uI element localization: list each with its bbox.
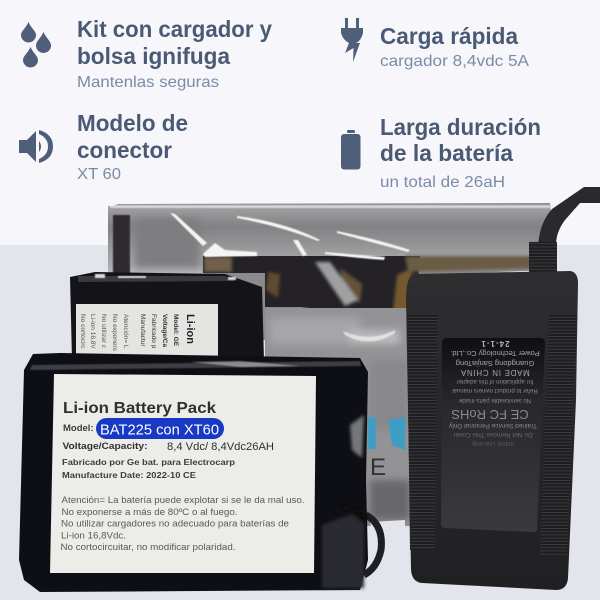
- icon: water drops: [21, 22, 51, 68]
- plastic highlights: [110, 205, 550, 342]
- label text, upside down: Indoor Use only: [472, 440, 514, 446]
- rear battery label: [76, 304, 218, 358]
- label warning text: [60, 495, 304, 552]
- printed label panel: [441, 338, 545, 532]
- label text, upside down: for application of this adapter: [456, 378, 534, 384]
- label text, upside down: No serviceable parts inside: [458, 397, 531, 403]
- label text, upside down: 24-1-1: [480, 339, 510, 348]
- title: modelo de: Modelo de: [77, 110, 188, 136]
- subtitle: un total: un total de 26aH: [380, 174, 505, 191]
- label text, upside down: Power Technology Co.,Ltd.: [450, 349, 540, 358]
- heading block: modelo de conector: [19, 110, 188, 183]
- rotated label text: No utilizar c: [100, 314, 107, 349]
- icon: battery: [341, 130, 360, 170]
- label text, upside down: Guangdong SanjiaTong: [456, 359, 534, 368]
- photo: power adapter charger: [406, 271, 578, 590]
- lower gray bag panel: [265, 308, 411, 526]
- label manufacturer: Fabricado por Ge bat. para Electrocarp: [62, 458, 235, 467]
- right ribs: [540, 315, 577, 555]
- battery label sheet: [50, 374, 316, 573]
- heading block: larga duracion: [341, 114, 541, 191]
- label text, upside down: Do Not Remove This Cover: [452, 431, 533, 438]
- title: carga rapida: Carga rápida: [380, 23, 518, 49]
- white gap below bag: [370, 520, 405, 535]
- left ribs: [407, 315, 438, 550]
- rotated label text: Li-ion: [184, 314, 196, 344]
- label title: Li-ion Battery Pack: [63, 400, 216, 417]
- bag print letter: E: [370, 454, 386, 481]
- title: de la bateria: de la batería: [380, 140, 513, 166]
- blue bag print: [368, 417, 405, 450]
- label warning text: No exponerse a más de 80ºC o al fuego.: [62, 507, 238, 517]
- label warning text: No utilizar cargadores no adecuado para baterías de: [61, 518, 289, 528]
- rotated label text: Manufactur: [139, 314, 146, 347]
- photo: charger cable: [529, 187, 600, 274]
- label warning text: Li-ion 16,8Vdc.: [61, 530, 126, 540]
- photo: front battery pack: [19, 353, 381, 592]
- title: conector: conector: [77, 137, 172, 163]
- heading block: kit con cargador: [21, 16, 272, 91]
- label text, upside down: Trained Service Personal Only: [448, 422, 537, 429]
- page background: lower band: [0, 245, 600, 600]
- rotated label text: Atención= L: [122, 314, 129, 349]
- title line 2: bolsa ignifuga: [77, 43, 230, 69]
- label text, upside down: [448, 339, 540, 446]
- dark interior of bag: [203, 256, 420, 318]
- side reflections: [322, 415, 366, 588]
- rotated label text: Model: GE: [172, 314, 179, 347]
- rotated label text: Voltage/Ca: [161, 314, 168, 347]
- label text, upside down: Refer to product owners manual: [452, 387, 538, 393]
- icon: speaker: [19, 130, 53, 163]
- rotated label text: No exponers: [111, 314, 118, 352]
- subtitle: xt 60: XT 60: [77, 166, 121, 183]
- title: larga duracion: Larga duración: [380, 114, 541, 140]
- strain relief: [529, 242, 557, 274]
- subtitle: mantenlas seguras: Mantenlas seguras: [77, 74, 219, 91]
- battery cable loop: [364, 515, 381, 575]
- label voltage capacity: Voltage/Capacity:: [62, 441, 148, 452]
- top wrap highlight: [30, 361, 361, 370]
- label manufacturer: [62, 458, 235, 480]
- label voltage capacity: 8,4 Vdc/ 8,4Vdc26AH: [167, 441, 274, 453]
- title: kit con cargador y bolsa ignifuga: Kit con cargador y: [77, 16, 272, 42]
- rotated label text: [79, 314, 196, 352]
- blue model highlight: BAT225 con XT60: [100, 422, 219, 438]
- rotated label text: Li-ion 16,8V: [89, 314, 96, 349]
- label text, upside down: CE FC RoHS: [451, 407, 529, 422]
- rotated label text: No cortocirc: [79, 314, 86, 349]
- subtitle: cargador: cargador 8,4vdc 5A: [380, 53, 529, 70]
- label manufacturer: Manufacture Date: 2022-10 CE: [62, 471, 197, 480]
- label warning text: No cortocircuitar, no modificar polaridad.: [60, 542, 236, 552]
- label text, upside down: MADE IN CHINA: [460, 368, 530, 377]
- photo: rear battery pack: [70, 272, 264, 360]
- icon: plug with lightning: [341, 18, 363, 62]
- photo: fire-resistant bag in plastic wrap: [108, 203, 552, 535]
- battery body: [19, 353, 368, 592]
- rotated label text: Fabricado p: [150, 314, 157, 349]
- heading block: carga rapida: [341, 18, 529, 70]
- label warning text: Atención= La batería puede explotar si se le da mal uso.: [62, 495, 304, 505]
- label model: Model:: [63, 423, 94, 434]
- label voltage capacity: [62, 441, 274, 453]
